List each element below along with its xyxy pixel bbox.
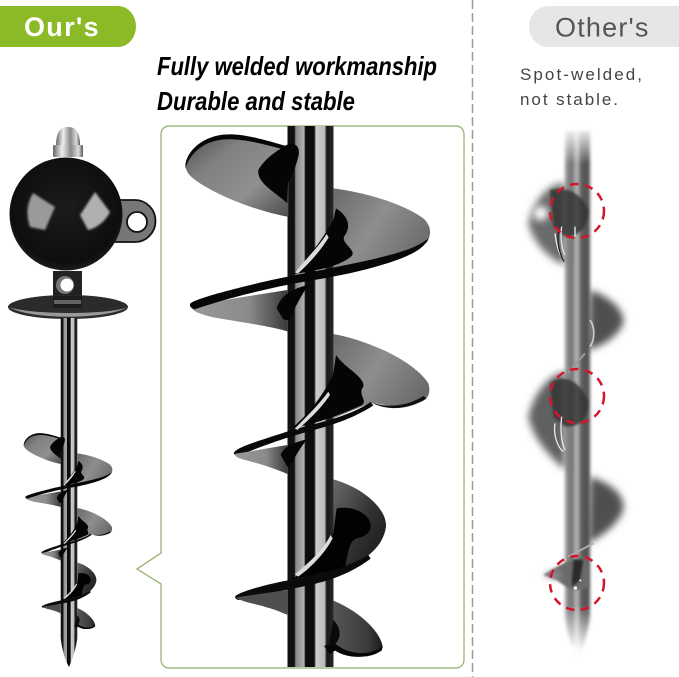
side eyelet: [113, 200, 156, 242]
text: spot-welded: Spot-welded,: [520, 65, 642, 84]
product: ground anchor: [8, 127, 156, 667]
base disc: [8, 295, 128, 319]
heading: fully welded: [157, 51, 437, 116]
ball: [10, 158, 122, 270]
shaft: [565, 130, 590, 660]
acorn nut: [53, 127, 83, 157]
stem: [53, 271, 82, 305]
badge: Our's: [0, 6, 136, 47]
badge: Other's: Other's: [555, 12, 650, 42]
divider: [472, 0, 474, 677]
badge: Our's: Our's: [24, 12, 100, 42]
red dashed circles: [550, 184, 604, 610]
flight blobs: [528, 183, 623, 590]
badge: Other's: [529, 6, 679, 47]
text: spot-welded: [520, 65, 642, 109]
text: spot-welded: not stable.: [520, 90, 618, 109]
bottom fade: [555, 605, 600, 660]
close-up auger: [185, 126, 430, 667]
heading: fully welded: Fully welded workmanship: [157, 51, 437, 81]
other's product: blurred auger: [528, 126, 623, 660]
shaft: [61, 318, 77, 667]
auger flights: [24, 433, 112, 629]
heading: fully welded: Durable and stable: [157, 86, 355, 116]
panel: close-up callout: [137, 126, 464, 668]
top fade: [555, 126, 600, 164]
